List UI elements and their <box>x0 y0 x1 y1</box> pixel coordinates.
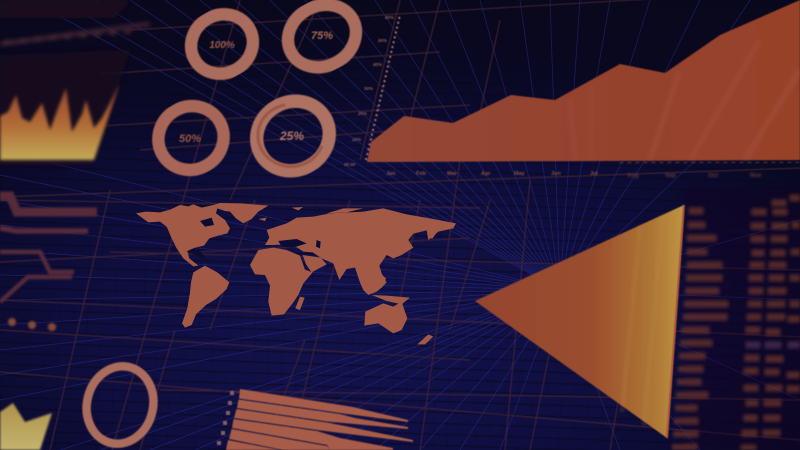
table rows: second column <box>752 209 766 215</box>
month labels: Apr <box>481 171 491 177</box>
area chart: Sep <box>665 173 676 179</box>
y axis labels <box>344 15 394 167</box>
month labels: Jan <box>386 171 396 177</box>
Iceland and Arctic islands <box>292 207 303 210</box>
flame panel backing <box>0 50 130 165</box>
Africa <box>250 248 313 316</box>
Gulf of Mexico <box>187 248 207 260</box>
bars <box>226 389 413 450</box>
area chart: Aug <box>627 173 639 179</box>
month labels: May <box>514 171 526 177</box>
month labels <box>386 171 598 177</box>
y axis labels: 00.00 <box>344 162 356 167</box>
panel: top-left dim chart axis <box>0 0 150 44</box>
area chart: Oct <box>708 173 718 179</box>
y axis labels: 40% <box>372 62 382 67</box>
y axis labels: 10% <box>352 137 361 142</box>
y axis labels: 50% <box>378 38 387 43</box>
panel: flame area chart <box>0 50 130 169</box>
bottom bar chart <box>217 389 413 450</box>
area fill <box>367 0 800 162</box>
triangle funnel chart <box>475 205 684 438</box>
ring 75% <box>277 0 367 79</box>
ring 25%: 25% <box>279 129 304 143</box>
ring 25% <box>244 88 342 184</box>
ring 75%: 75% <box>311 30 333 42</box>
panel: left circuit lines <box>0 196 97 302</box>
area chart <box>344 0 800 179</box>
Madagascar <box>295 297 305 310</box>
Mediterranean <box>278 239 307 248</box>
month labels: Feb <box>416 171 426 177</box>
flame chart <box>0 83 120 160</box>
chart x axis dots <box>363 163 620 165</box>
month labels: Jun <box>551 171 561 177</box>
Hudson Bay <box>200 218 214 227</box>
crown mini chart <box>0 403 52 450</box>
ring bottom <box>79 359 161 450</box>
month labels: Mar <box>447 171 458 177</box>
dots row <box>8 318 56 331</box>
area chart: Nov <box>750 173 762 179</box>
y axis labels: 30% <box>364 86 373 91</box>
New Zealand <box>417 334 433 344</box>
Japan <box>428 230 438 238</box>
table rows: fourth column <box>790 195 800 201</box>
Philippines <box>380 273 386 286</box>
ring 50%: 50% <box>179 133 201 145</box>
Caspian <box>316 240 321 248</box>
table rows: third column <box>772 200 786 206</box>
Australia <box>364 302 407 333</box>
month labels: Jul <box>590 171 598 177</box>
light streaks on area <box>570 40 800 160</box>
data table <box>672 190 800 450</box>
Arabia <box>303 255 327 272</box>
y axis labels: 20% <box>357 111 367 116</box>
world map <box>136 203 456 344</box>
table rows: first column <box>689 208 703 214</box>
table backing <box>686 190 800 450</box>
South America <box>182 266 229 328</box>
flame axis ticks <box>0 168 92 170</box>
ring 100%: 100% <box>209 40 235 51</box>
Eurasia <box>265 208 456 295</box>
bar axis labels <box>217 391 234 445</box>
North America <box>136 203 268 266</box>
ring 100% <box>180 3 264 85</box>
ring 50% <box>147 94 235 182</box>
Indonesia <box>372 295 410 304</box>
y axis labels: 60% <box>385 15 394 20</box>
panel: percentage rings <box>147 0 367 184</box>
chart y axis dots <box>366 15 400 160</box>
